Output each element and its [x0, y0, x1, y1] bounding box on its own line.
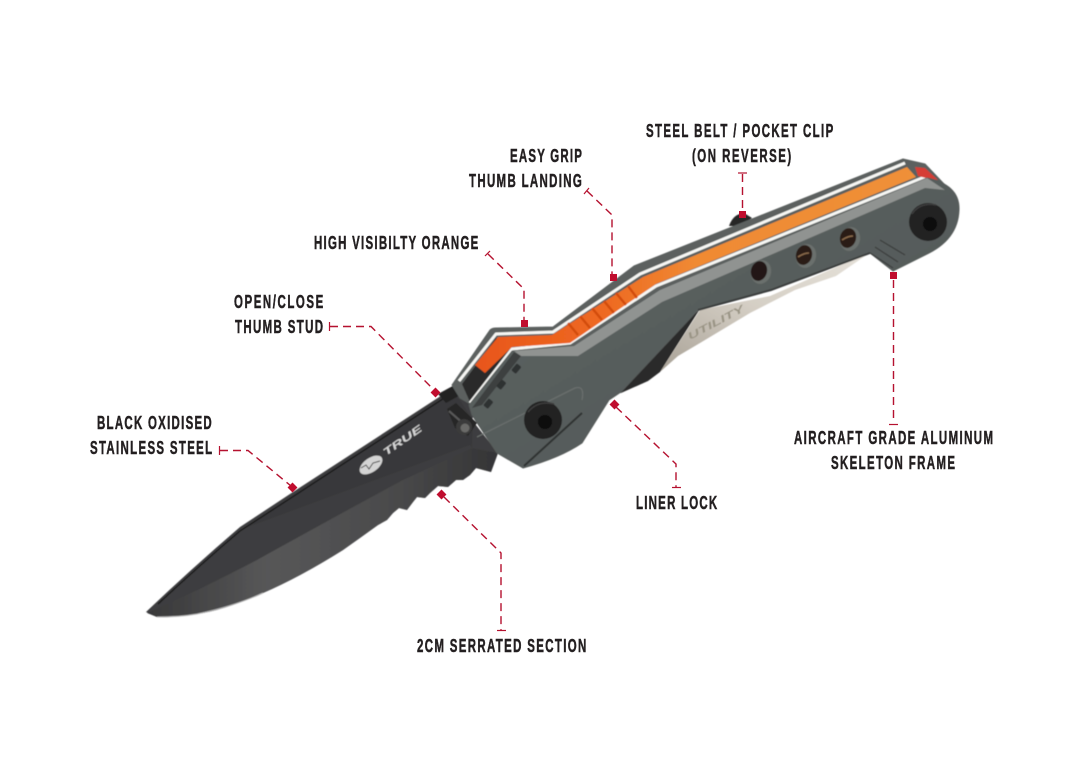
label: easy grip thumb landing [469, 146, 582, 192]
blade logo: TRUE [381, 423, 425, 458]
label: easy grip thumb landing: EASY GRIP [510, 146, 582, 167]
label: black oxidised stainless steel [90, 413, 212, 459]
dark gap behind orange [462, 338, 512, 402]
label: black oxidised stainless steel: BLACK OXIDISED [97, 413, 212, 434]
label: steel belt / pocket clip: (ON REVERSE) [692, 146, 791, 167]
dark liner under handle [610, 309, 700, 393]
knife [146, 159, 959, 617]
leader: serrated [437, 490, 506, 630]
label: 2cm serrated section: 2CM SERRATED SECTION [417, 636, 586, 657]
leader: orange [485, 251, 528, 327]
label: black oxidised stainless steel: STAINLESS STEEL [90, 438, 212, 459]
rear liner and frame [452, 159, 945, 405]
label: open/close thumb stud: THUMB STUD [235, 317, 323, 338]
leader: thumb stud [330, 322, 440, 397]
leader: stainless steel [220, 446, 297, 492]
detents [483, 363, 522, 409]
orange strip [475, 167, 938, 373]
lock cutout line [524, 413, 582, 466]
label: aircraft grade aluminum skeleton frame: AIRCRAFT GRADE ALUMINUM [794, 428, 993, 449]
label: aircraft grade aluminum skeleton frame [794, 428, 993, 474]
white liners [459, 163, 927, 403]
label: open/close thumb stud: OPEN/CLOSE [234, 292, 323, 313]
frame holes [748, 225, 863, 286]
label: aircraft grade aluminum skeleton frame: SKELETON FRAME [831, 453, 955, 474]
label: liner lock: LINER LOCK [636, 493, 717, 514]
silver chamfer [514, 178, 945, 356]
blade logo [356, 423, 425, 478]
thumb stud lever [438, 382, 476, 403]
leader: thumb landing [584, 188, 617, 281]
rear screw [909, 203, 947, 241]
blade behind handle (tan section) [660, 252, 871, 372]
label: steel belt / pocket clip: STEEL BELT / POCKET CLIP [646, 121, 833, 142]
label: steel belt / pocket clip [646, 121, 833, 167]
blade [146, 380, 498, 617]
leader: liner lock [610, 400, 681, 488]
leader: aluminum frame [889, 272, 898, 424]
lower rail shade [698, 253, 870, 310]
label: easy grip thumb landing: THUMB LANDING [469, 171, 582, 192]
blade behind handle (tan section): UTILITY [686, 303, 748, 343]
front scale [469, 178, 959, 468]
label: open/close thumb stud [234, 292, 323, 338]
pivot screw [524, 401, 562, 439]
pocket clip stud [729, 213, 752, 226]
label: high visibility orange: HIGH VISIBILTY ORANGE [314, 233, 478, 254]
dark rim on left edge [472, 352, 521, 408]
thumb stud [447, 403, 477, 436]
leader: pocket clip [738, 173, 747, 218]
